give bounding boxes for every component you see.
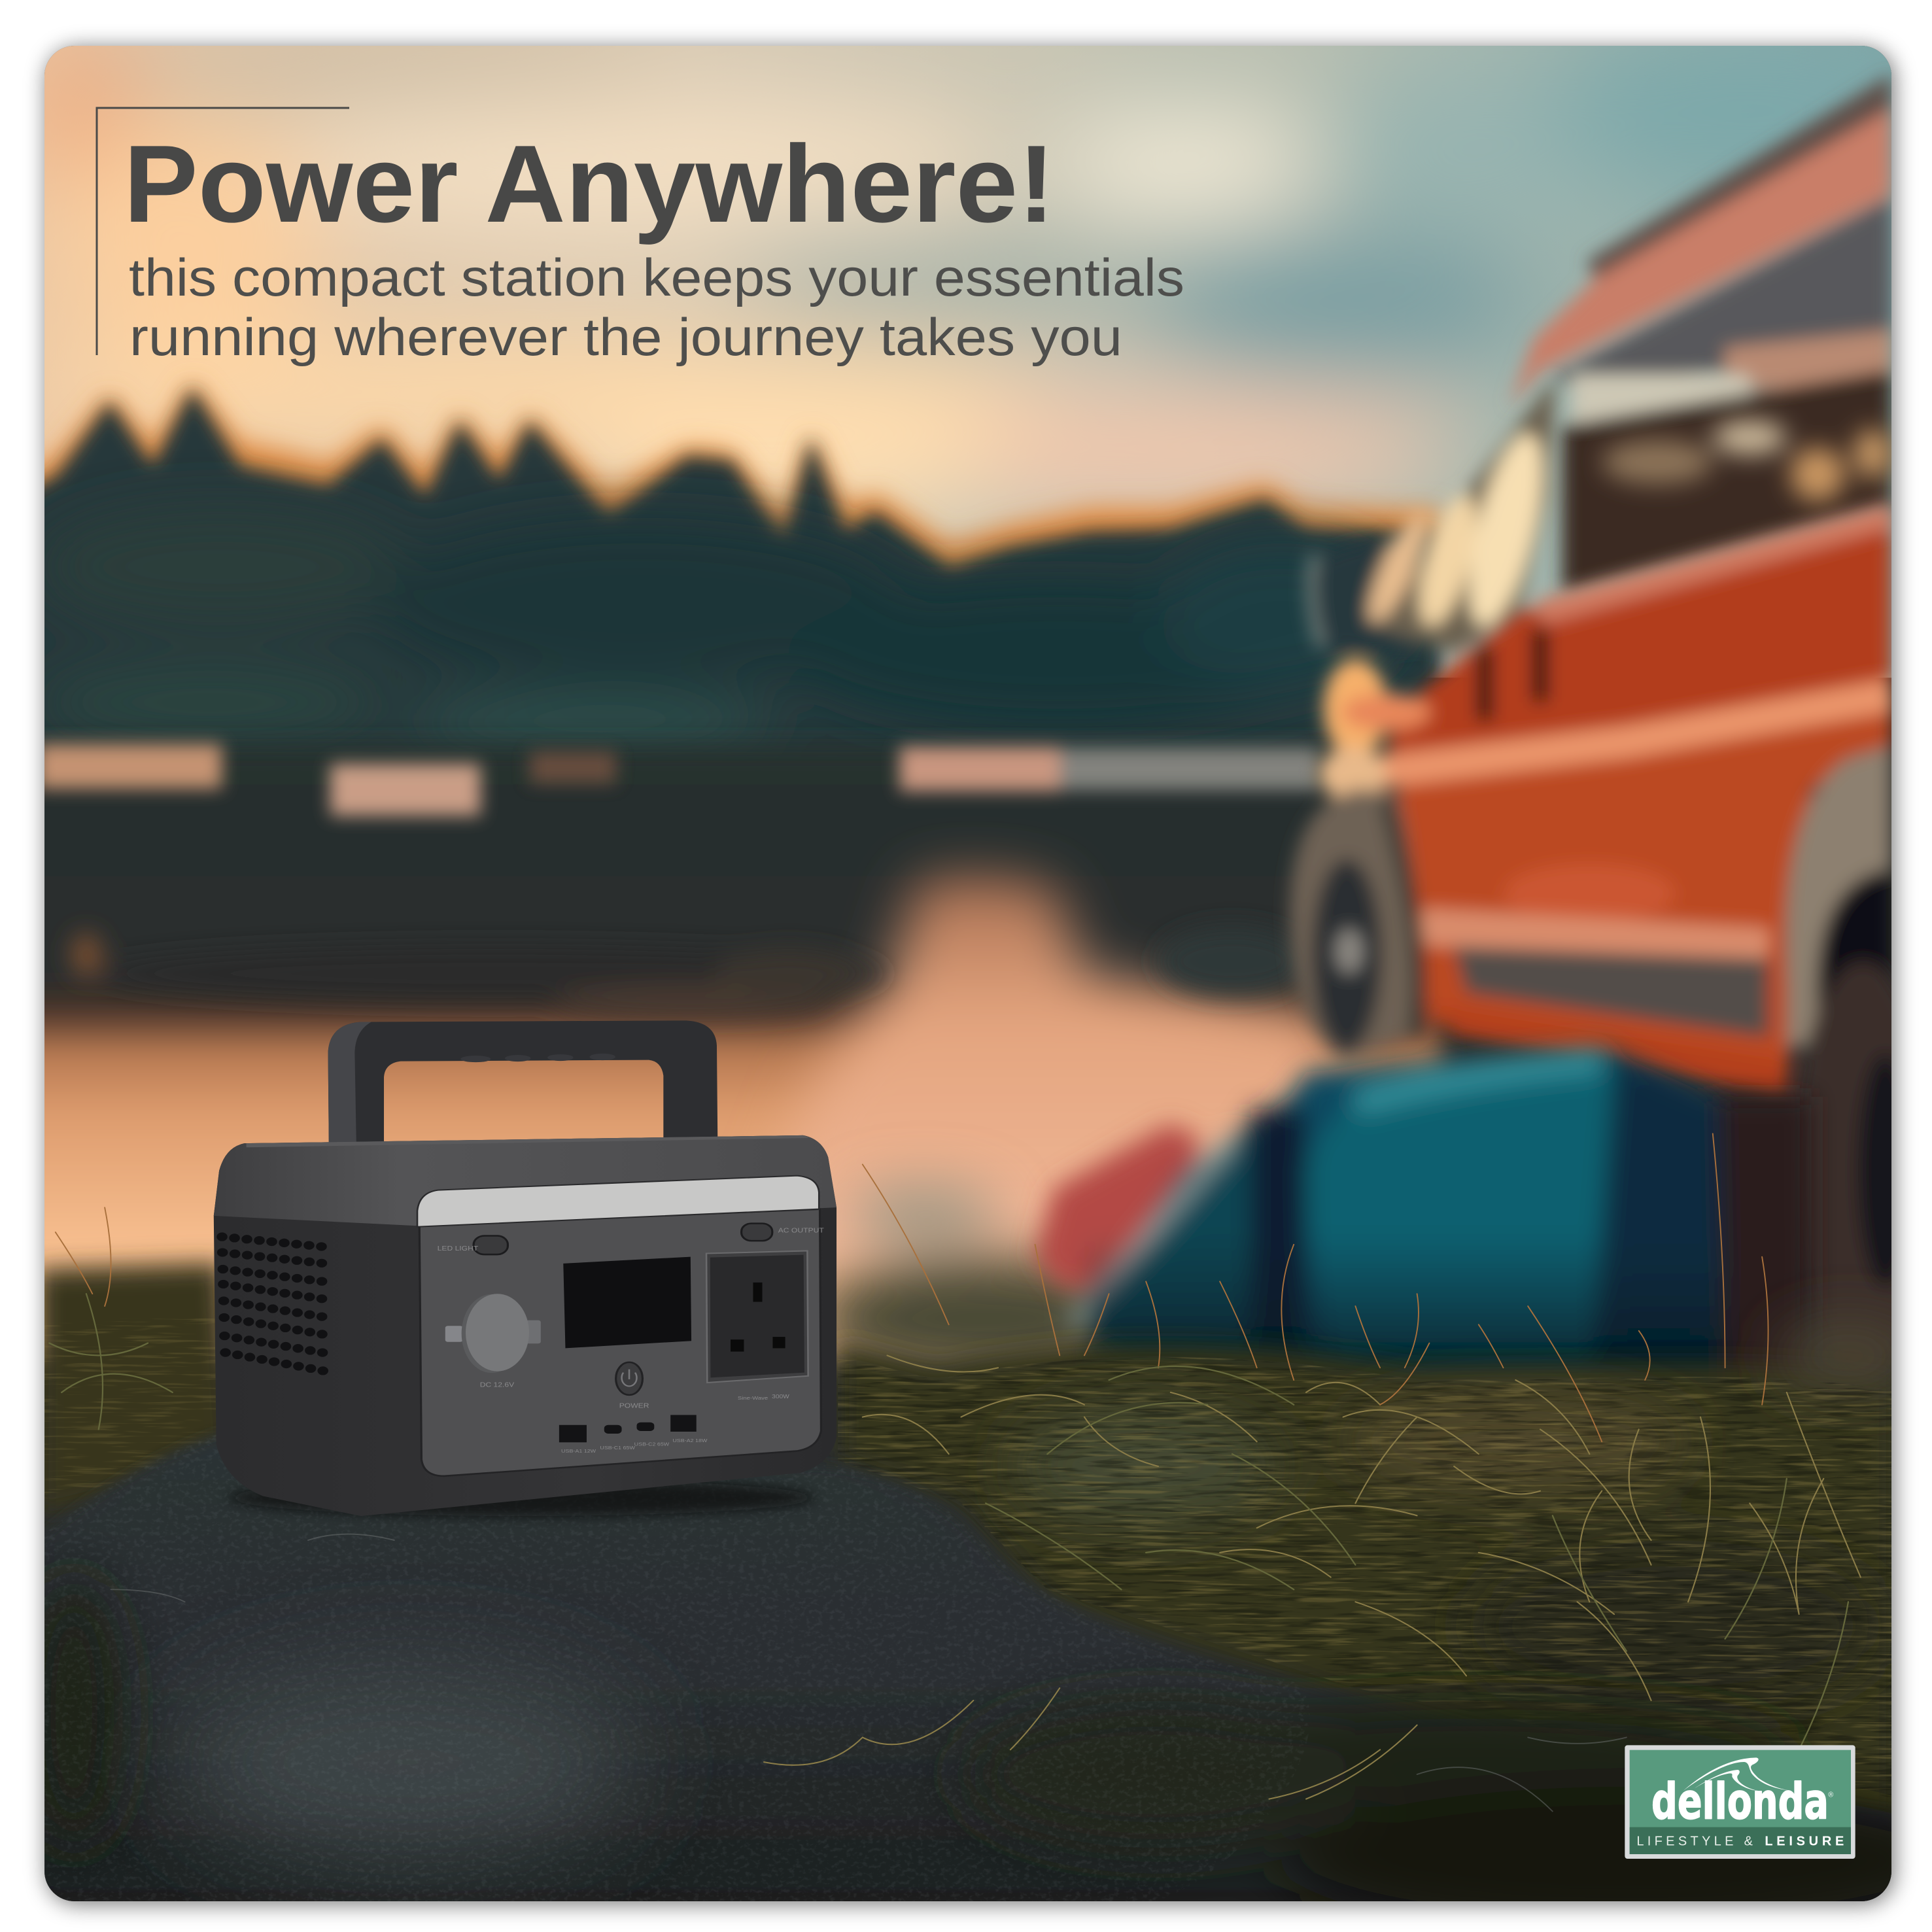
tagline: LIFESTYLE &	[1636, 1834, 1753, 1848]
grass behind station	[37, 1184, 1158, 1515]
tagline band	[1630, 1827, 1851, 1854]
subtitle: this compact station keeps your essentials	[129, 249, 1184, 307]
body	[214, 1135, 837, 1516]
title: Power Anywhere!	[124, 122, 1055, 245]
tagline: LEISURE	[1765, 1834, 1844, 1848]
portable power station	[214, 1020, 837, 1516]
registered mark: ®	[1828, 1791, 1833, 1799]
badge green field	[1630, 1750, 1851, 1854]
AC socket	[706, 1251, 808, 1383]
power button	[616, 1362, 642, 1395]
panel labels: LED LIGHT	[438, 1245, 479, 1252]
logo badge	[1625, 1745, 1855, 1859]
subtitle: running wherever the journey takes you	[129, 308, 1122, 367]
panel labels: USB-A2 18W	[672, 1438, 708, 1443]
tagline	[1636, 1834, 1844, 1848]
panel labels: DC 12.6V	[480, 1382, 515, 1389]
backpacks	[1035, 1047, 1811, 1392]
panel labels: Sine-Wave	[738, 1395, 768, 1401]
LED light button	[474, 1235, 508, 1254]
dellonda logo	[1625, 1745, 1855, 1859]
light bar	[417, 1176, 819, 1227]
panel labels: AC OUTPUT	[778, 1227, 824, 1234]
camper van	[1290, 74, 1932, 1380]
display screen	[563, 1257, 691, 1348]
contact shadow	[230, 1479, 814, 1516]
panel labels: USB-A1 12W	[561, 1449, 596, 1454]
grass mound	[37, 1319, 1922, 1823]
rock	[25, 1429, 1932, 1932]
lake water and reflection	[0, 744, 1441, 1362]
panel labels	[438, 1227, 824, 1454]
DC port cap	[445, 1294, 541, 1373]
accent bracket	[97, 108, 349, 355]
panel labels: 300W	[772, 1394, 789, 1400]
subtitle	[129, 249, 1184, 367]
wave mark	[1683, 1757, 1789, 1791]
AC output button	[742, 1224, 772, 1241]
wordmark: dellonda	[1651, 1773, 1829, 1831]
side vents	[222, 1237, 333, 1373]
front panel	[419, 1209, 821, 1476]
panel labels: USB-C2 65W	[634, 1441, 670, 1447]
panel labels: USB-C1 65W	[600, 1445, 635, 1451]
panel labels: POWER	[619, 1403, 649, 1409]
carry handle	[328, 1020, 717, 1147]
USB ports	[559, 1415, 697, 1442]
sky	[12, 25, 1932, 678]
forest treeline	[25, 382, 1441, 789]
grass blades	[49, 1133, 1861, 1811]
